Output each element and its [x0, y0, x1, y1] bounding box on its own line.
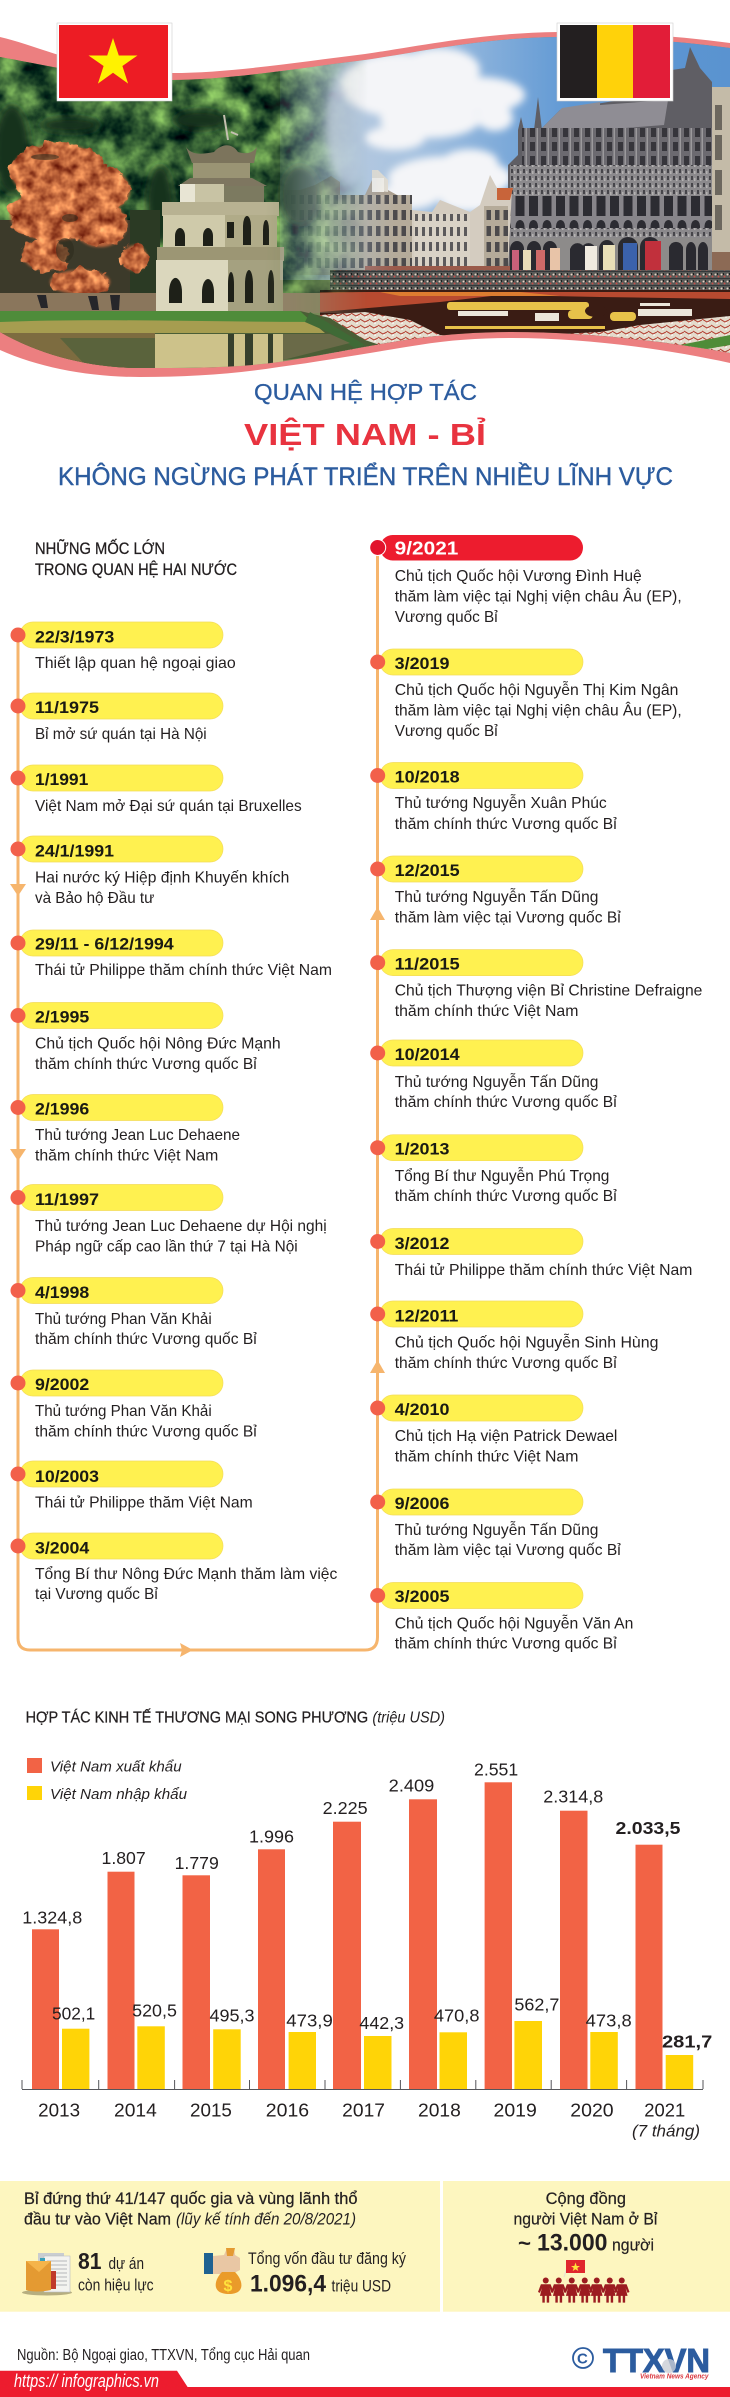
milestone 3/2019: Chủ tịch Quốc hội Nguyễn Thị Kim Ngân [395, 680, 678, 699]
import bars [62, 2021, 693, 2089]
year labels [38, 2100, 700, 2141]
milestone 12/2011: 12/2011 [395, 1308, 458, 1326]
milestone 3/2012: 3/2012 [395, 1235, 449, 1253]
milestone 2/1995 [10, 1002, 281, 1073]
export bars [32, 1782, 662, 2089]
milestone 10/2014 [370, 1040, 617, 1111]
crowd and flower carpet [320, 270, 730, 365]
year labels: 2014 [114, 2100, 157, 2121]
milestone 3/2019: thăm làm việc tại Nghị viện châu Âu (EP), [395, 701, 682, 720]
milestone 12/2011: thăm chính thức Vương quốc Bỉ [395, 1355, 617, 1372]
export values: 2.225 [323, 1798, 368, 1818]
milestone 9/2006: Thủ tướng Nguyễn Tấn Dũng [395, 1520, 598, 1539]
milestone 24/1/1991: 24/1/1991 [35, 842, 114, 860]
dark trees and street behind [0, 220, 130, 293]
milestone 10/2003: 10/2003 [35, 1468, 99, 1486]
milestone 2/1996: thăm chính thức Việt Nam [35, 1147, 218, 1164]
milestone 9/2006: 9/2006 [395, 1495, 449, 1513]
milestone 11/2015 [370, 950, 702, 1020]
source line: Nguồn: Bộ Ngoại giao, TTXVN, Tổng cục Hải quan [17, 2347, 310, 2364]
export values: 2.409 [389, 1776, 434, 1796]
milestone 2/1995: 2/1995 [35, 1008, 89, 1026]
wave frame: pink band [0, 32, 730, 377]
stat: total registered capital [248, 2250, 407, 2298]
milestone 9/2021 (highlighted): Vương quốc Bỉ [395, 609, 498, 626]
milestone 3/2004: Tổng Bí thư Nông Đức Mạnh thăm làm việc [35, 1565, 337, 1583]
stat: 81 projects [78, 2248, 154, 2295]
milestone 10/2018 [370, 762, 617, 833]
milestone 24/1/1991: và Bảo hộ Đầu tư [35, 890, 155, 907]
milestone 1/2013: Tổng Bí thư Nguyễn Phú Trọng [395, 1166, 609, 1185]
export values: 1.779 [175, 1853, 219, 1873]
bar chart: bilateral trade [22, 1760, 712, 2141]
community text: ~ [518, 2231, 531, 2256]
stat: 81 projects: 81 [78, 2248, 102, 2274]
milestone 12/2015: thăm làm việc tại Vương quốc Bỉ [395, 910, 621, 926]
orange tree base colour [10, 144, 147, 294]
milestone 29/11 - 6/12/1994: 29/11 - 6/12/1994 [35, 936, 175, 954]
export values: 2.033,5 [616, 1818, 681, 1838]
milestone 9/2002 [10, 1370, 257, 1441]
milestone 12/2015: 12/2015 [395, 862, 460, 880]
milestone 11/1997: Pháp ngữ cấp cao lần thứ 7 tại Hà Nội [35, 1238, 298, 1256]
title [58, 379, 673, 491]
stat: 81 projects: dự án [108, 2255, 144, 2273]
year labels: 2019 [494, 2100, 537, 2121]
x axis [22, 2080, 703, 2090]
icon: documents and folder [22, 2253, 72, 2296]
milestone 3/2019: Vương quốc Bỉ [395, 723, 498, 740]
left: Hoan Kiem foliage, tree and tower [0, 40, 374, 313]
milestone 11/2015: Chủ tịch Thượng viện Bỉ Christine Defraigne [395, 983, 702, 1000]
milestone 12/2011: Chủ tịch Quốc hội Nguyễn Sinh Hùng [395, 1332, 658, 1352]
chart legend: Việt Nam xuất khẩu [50, 1760, 182, 1776]
milestone 3/2012: Thái tử Philippe thăm chính thức Việt Nam [395, 1262, 692, 1279]
icon: hand holding money bag: $ [224, 2278, 232, 2295]
import values: 470,8 [434, 2006, 480, 2026]
investment heading [24, 2190, 358, 2228]
community text: người Việt Nam ở Bỉ [514, 2210, 658, 2228]
milestone 10/2018: thăm chính thức Vương quốc Bỉ [395, 816, 617, 833]
milestone 1/2013 [370, 1135, 617, 1205]
milestone 3/2004: 3/2004 [35, 1539, 90, 1557]
icon: hand holding money bag [204, 2248, 241, 2295]
section heading: milestones: NHỮNG MỐC LỚN [35, 538, 165, 558]
panel: right timeline [369, 535, 702, 1653]
import values: 562,7 [514, 1995, 559, 2015]
milestone 29/11 - 6/12/1994: Thái tử Philippe thăm chính thức Việt Nam [35, 962, 332, 979]
milestone 3/2005: thăm chính thức Vương quốc Bỉ [395, 1636, 617, 1653]
Turtle Tower [156, 115, 284, 313]
milestone 3/2005: Chủ tịch Quốc hội Nguyễn Văn An [395, 1613, 633, 1632]
year labels: 2016 [266, 2100, 309, 2121]
year labels: 2017 [342, 2100, 385, 2121]
import values: 281,7 [662, 2031, 712, 2051]
year labels: (7 tháng) [632, 2122, 700, 2141]
milestone 3/2012 [370, 1228, 692, 1279]
milestone 4/2010 [370, 1395, 617, 1466]
export values [22, 1760, 681, 1927]
export values: 2.314,8 [543, 1787, 603, 1807]
middle: guild houses [283, 170, 513, 275]
milestone 11/2015: thăm chính thức Việt Nam [395, 1003, 578, 1020]
orange tree texture [9, 142, 148, 295]
milestone 10/2018: 10/2018 [395, 768, 460, 786]
section heading: milestones [35, 538, 237, 579]
stat: total registered capital: Tổng vốn đầu tư đăng ký [248, 2250, 407, 2268]
milestone 3/2004 [10, 1533, 337, 1603]
milestone 3/2005: 3/2005 [395, 1588, 449, 1606]
milestone 12/2015 [370, 856, 621, 926]
import values: 502,1 [52, 2003, 95, 2023]
milestone 11/1975: Bỉ mở sứ quán tại Hà Nội [35, 726, 207, 743]
milestone 10/2003 [10, 1461, 253, 1512]
year labels: 2015 [190, 2100, 232, 2121]
export values: 1.996 [249, 1827, 294, 1847]
milestone 9/2021 (highlighted): thăm làm việc tại Nghị viện châu Âu (EP), [395, 586, 682, 605]
milestone 4/2010: thăm chính thức Việt Nam [395, 1448, 578, 1466]
flag: Belgium [557, 23, 673, 101]
title: QUAN HỆ HỢP TÁC [254, 379, 477, 405]
milestone 10/2014: 10/2014 [395, 1046, 461, 1064]
milestone 1/1991 [10, 765, 302, 815]
flag: Vietnam [57, 23, 172, 101]
export values: 1.324,8 [22, 1907, 82, 1927]
community text: 13.000 [537, 2230, 608, 2257]
investment heading: (lũy kế tính đến 20/8/2021) [176, 2210, 356, 2228]
milestone 9/2002: thăm chính thức Vương quốc Bỉ [35, 1424, 257, 1441]
section heading: milestones: TRONG QUAN HỆ HAI NƯỚC [35, 560, 237, 579]
shoreline ground [0, 293, 160, 311]
milestone 11/1997: 11/1997 [35, 1191, 99, 1209]
milestone 4/2010: 4/2010 [395, 1401, 449, 1419]
right: Grand Place town hall [508, 47, 730, 275]
milestone 29/11 - 6/12/1994 [10, 930, 332, 979]
milestone 2/1995: Chủ tịch Quốc hội Nông Đức Mạnh [35, 1036, 281, 1053]
milestone 9/2002: 9/2002 [35, 1376, 89, 1394]
chart legend [27, 1758, 187, 1803]
milestone 1/2013: 1/2013 [395, 1141, 449, 1159]
milestone 9/2002: Thủ tướng Phan Văn Khải [35, 1403, 212, 1420]
milestone 12/2011 [370, 1301, 658, 1372]
year labels: 2013 [38, 2100, 80, 2121]
photo collage: Hanoi and Brussels [0, 30, 730, 375]
footer bar with website: https:// infographics.vn [14, 2371, 159, 2391]
chart heading: HỢP TÁC KINH TẾ THƯƠNG MẠI SONG PHƯƠNG [26, 1710, 368, 1727]
import values: 495,3 [210, 2006, 254, 2026]
icon: people with flag [538, 2260, 630, 2303]
year labels: 2020 [570, 2100, 614, 2121]
milestone 1/2013: thăm chính thức Vương quốc Bỉ [395, 1188, 617, 1205]
milestone 1/1991: Việt Nam mở Đại sứ quán tại Bruxelles [35, 798, 302, 815]
milestone 9/2006 [370, 1489, 621, 1559]
milestone 11/1975: 11/1975 [35, 699, 99, 717]
timeline connector with arrows [10, 548, 385, 1657]
milestone 4/1998: 4/1998 [35, 1284, 89, 1302]
logo: TTXVN: Vietnam News Agency [640, 2372, 709, 2380]
milestone 22/3/1973 [10, 622, 236, 672]
import values: 442,3 [359, 2013, 404, 2033]
footer bar with website [0, 2371, 730, 2397]
milestone 10/2018: Thủ tướng Nguyễn Xuân Phúc [395, 793, 607, 812]
milestone 10/2014: thăm chính thức Vương quốc Bỉ [395, 1094, 617, 1111]
community text: Cộng đồng [546, 2190, 626, 2208]
milestone 2/1995: thăm chính thức Vương quốc Bỉ [35, 1056, 257, 1073]
import values: 473,9 [286, 2011, 333, 2031]
export values: 1.807 [102, 1848, 146, 1868]
investment heading: Bỉ đứng thứ 41/147 quốc gia và vùng lãnh thổ [24, 2190, 358, 2208]
milestone 11/2015: 11/2015 [395, 956, 460, 974]
posters [512, 241, 661, 270]
year labels: 2021 [644, 2100, 685, 2121]
milestone 11/1997: Thủ tướng Jean Luc Dehaene dự Hội nghị [35, 1218, 327, 1235]
grass and lake [0, 311, 380, 372]
export values: 2.551 [474, 1760, 518, 1780]
milestone 11/1975 [10, 693, 223, 743]
year labels: 2018 [418, 2100, 461, 2121]
logo: TTXVN: TTXVN [603, 2342, 710, 2379]
milestone 3/2019: 3/2019 [395, 655, 449, 673]
milestone 4/1998 [10, 1278, 257, 1348]
stat: total registered capital: 1.096,4 [250, 2271, 327, 2298]
investment heading: đầu tư vào Việt Nam [24, 2210, 171, 2228]
milestone 2/1996: 2/1996 [35, 1100, 89, 1118]
milestone 3/2004: tại Vương quốc Bỉ [35, 1586, 158, 1603]
milestone 10/2014: Thủ tướng Nguyễn Tấn Dũng [395, 1072, 598, 1091]
panel: left timeline [10, 622, 337, 1603]
milestone 4/1998: Thủ tướng Phan Văn Khải [35, 1311, 212, 1328]
milestone 22/3/1973: 22/3/1973 [35, 628, 114, 646]
milestone 11/1997 [10, 1184, 327, 1256]
milestone 3/2005 [370, 1582, 633, 1653]
milestone 4/1998: thăm chính thức Vương quốc Bỉ [35, 1331, 257, 1348]
import values: 520,5 [132, 2001, 177, 2021]
chart heading: (triệu USD) [372, 1710, 445, 1727]
community text [514, 2190, 658, 2257]
milestone 2/1996 [10, 1094, 240, 1164]
panel: Vietnamese community in Belgium [443, 2181, 730, 2312]
import values [52, 1995, 712, 2051]
panel: Belgium investment in Vietnam [0, 2181, 440, 2312]
milestone 3/2019 [370, 649, 682, 740]
milestone 22/3/1973: Thiết lập quan hệ ngoại giao [35, 655, 236, 672]
milestone 9/2021 (highlighted) [369, 535, 682, 626]
milestone 12/2015: Thủ tướng Nguyễn Tấn Dũng [395, 887, 598, 906]
stat: 81 projects: còn hiệu lực [78, 2277, 154, 2295]
title: VIỆT NAM - BỈ [244, 416, 486, 452]
title: KHÔNG NGỪNG PHÁT TRIỂN TRÊN NHIỀU LĨNH VỰC [58, 462, 673, 491]
milestone 24/1/1991 [10, 836, 289, 907]
logo: TTXVN: C [577, 2350, 588, 2368]
milestone 9/2021 (highlighted): Chủ tịch Quốc hội Vương Đình Huệ [395, 568, 642, 585]
import values: 473,8 [586, 2011, 632, 2031]
milestone 1/1991: 1/1991 [35, 771, 88, 789]
community text: người [612, 2236, 654, 2255]
chart legend: Việt Nam nhập khẩu [50, 1787, 187, 1803]
milestone 2/1996: Thủ tướng Jean Luc Dehaene [35, 1127, 240, 1144]
milestone 24/1/1991: Hai nước ký Hiệp định Khuyến khích [35, 870, 289, 886]
milestone 10/2003: Thái tử Philippe thăm Việt Nam [35, 1494, 253, 1512]
milestone 9/2021 (highlighted): 9/2021 [395, 539, 458, 559]
stat: total registered capital: triệu USD [332, 2278, 391, 2296]
milestone 9/2006: thăm làm việc tại Vương quốc Bỉ [395, 1542, 621, 1559]
milestone 4/2010: Chủ tịch Hạ viện Patrick Dewael [395, 1428, 617, 1445]
hero banner with photo collage [0, 30, 730, 377]
